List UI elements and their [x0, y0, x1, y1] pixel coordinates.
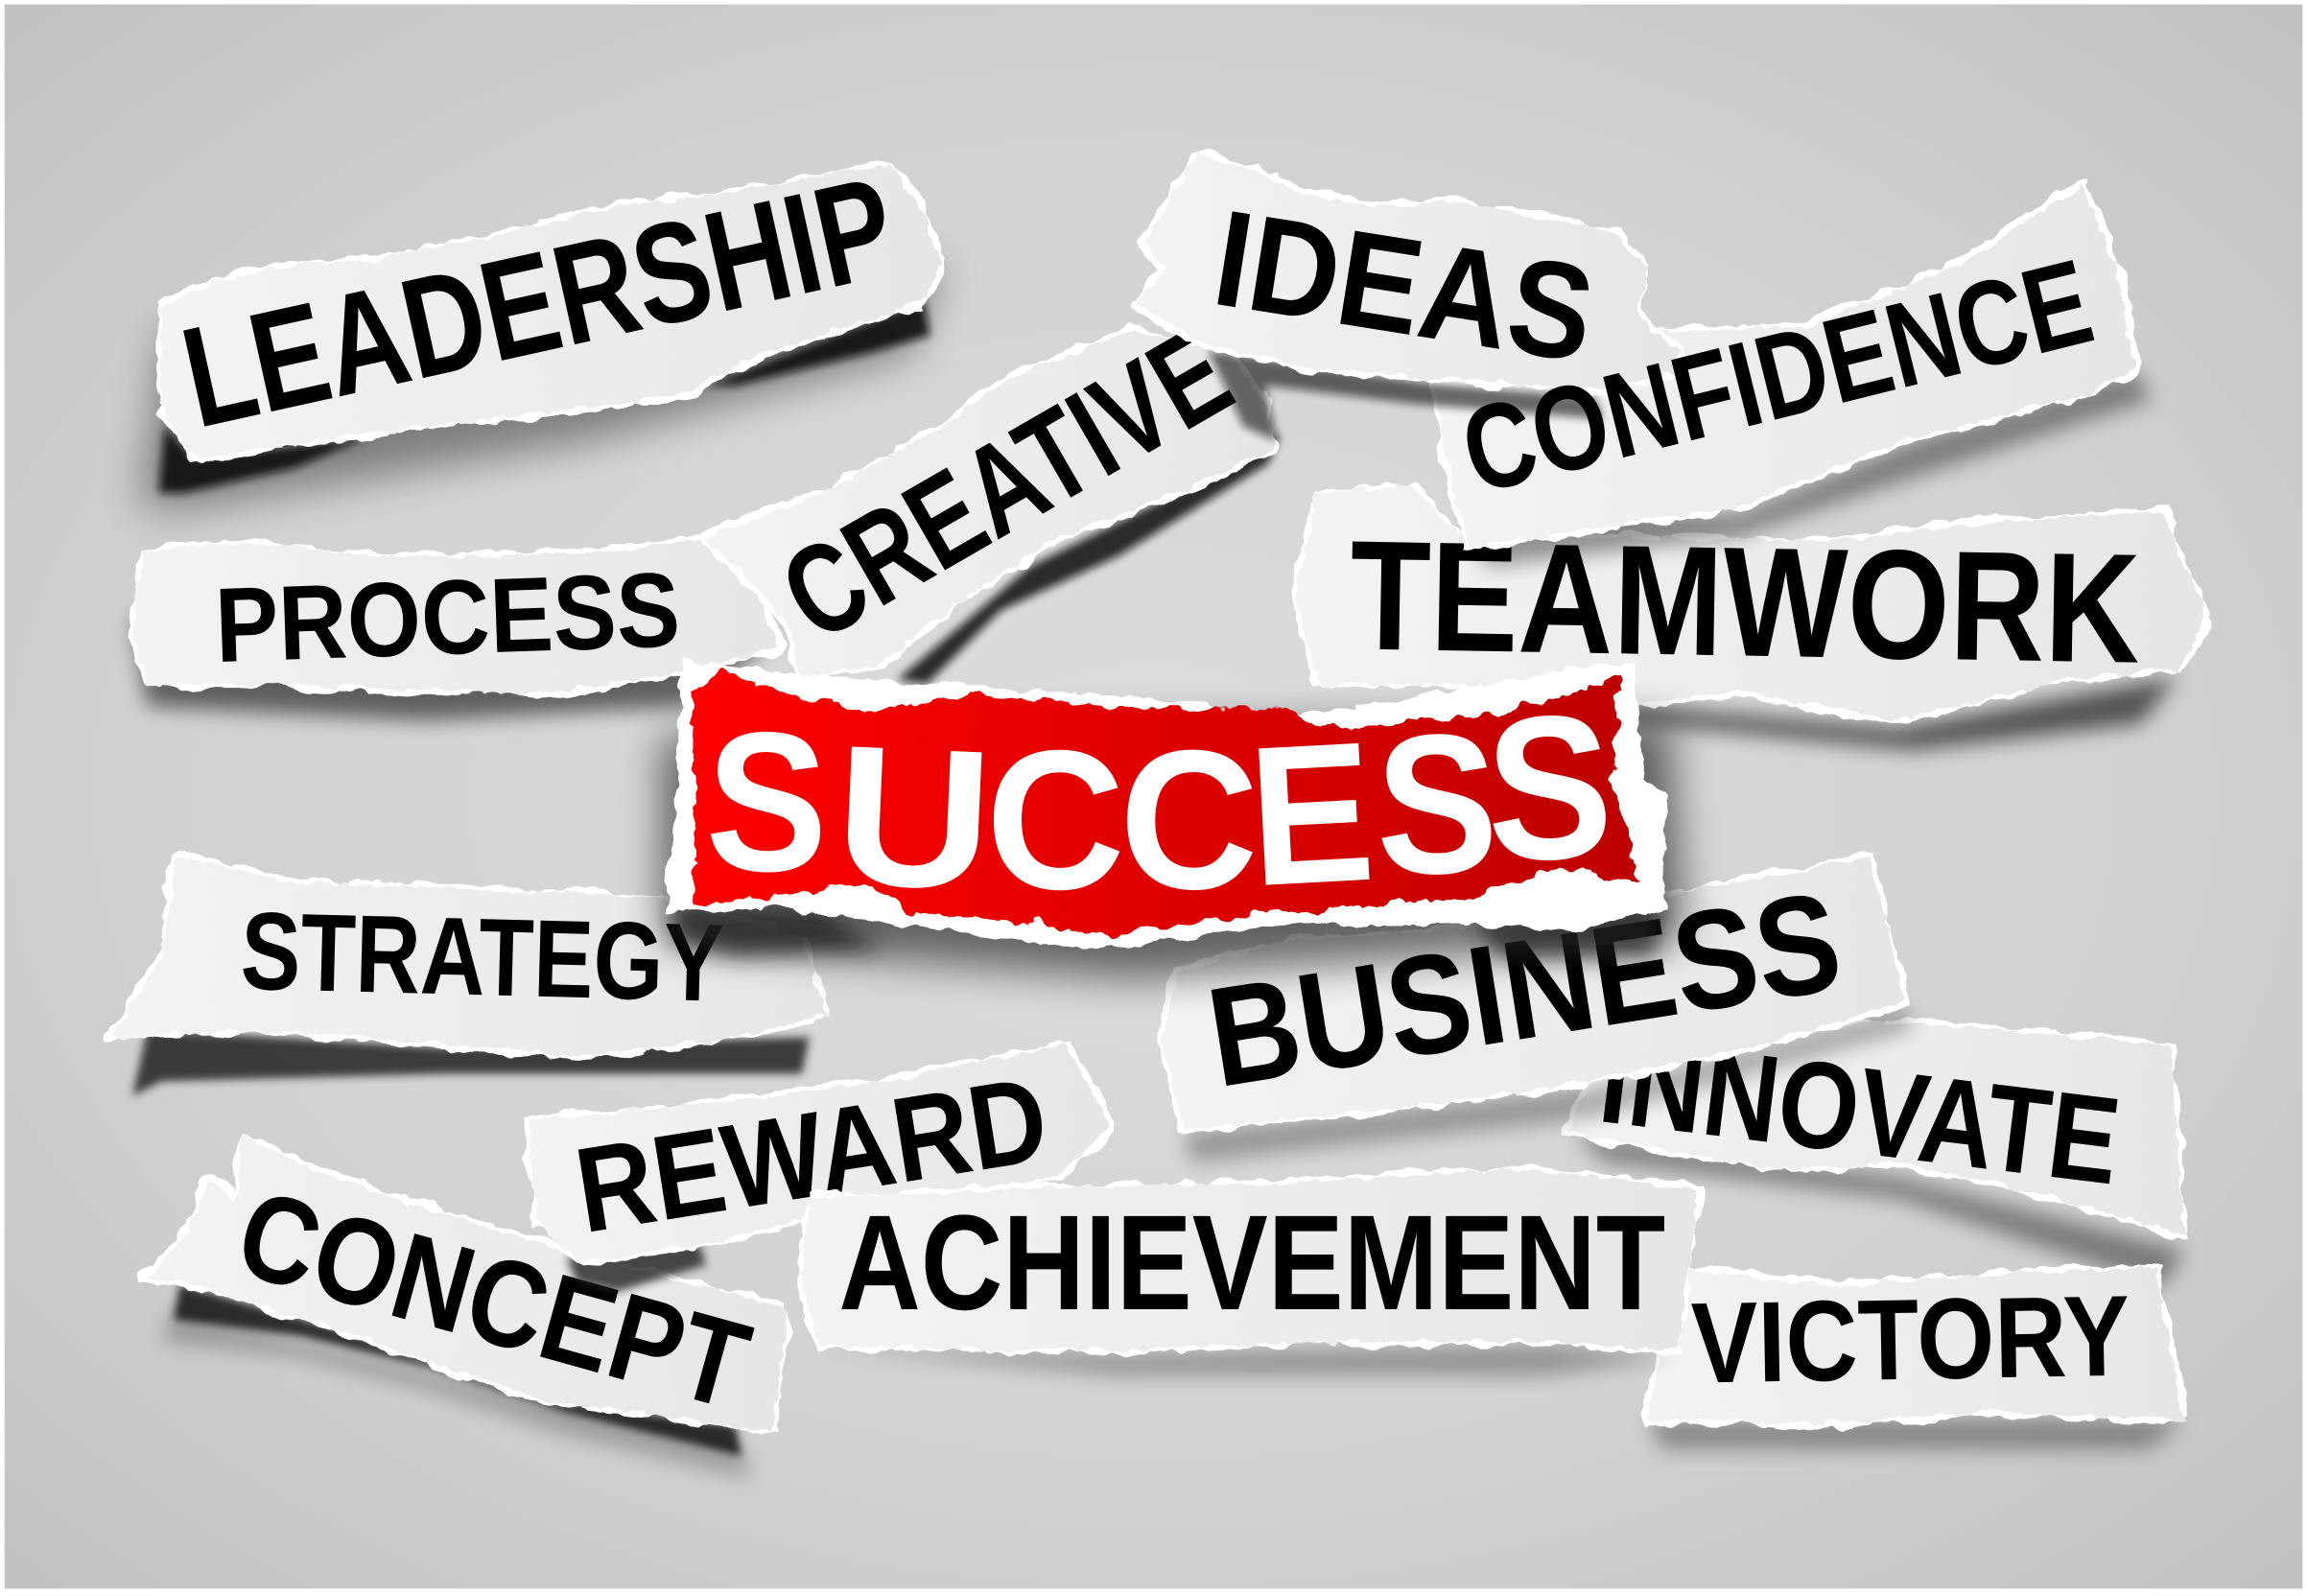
paper: VICTORY: VICTORY — [1690, 1273, 2130, 1408]
paper: CONCEPT — [144, 1136, 786, 1478]
paper: SUCCESS — [662, 665, 1684, 978]
paper: IDEAS: IDEAS — [1205, 182, 1604, 391]
word: SUCCESS: C — [986, 710, 1125, 931]
paper: VICTORY — [1645, 1268, 2185, 1449]
paper: PROCESS: PROCESS — [213, 551, 682, 685]
paper: TEAMWORK: TEAMWORK — [1349, 508, 2141, 696]
word: SUCCESS: S — [704, 691, 830, 914]
word: SUCCESS: E — [1244, 700, 1378, 928]
paper: CREATIVE — [703, 300, 1280, 684]
paper: STRATEGY — [110, 857, 827, 1096]
paper: CREATIVE: CREATIVE — [759, 300, 1254, 669]
word: SUCCESS: S — [1482, 672, 1615, 904]
word: SUCCESS: C — [1118, 708, 1260, 932]
paper: INNOVATE: INNOVATE — [1593, 1010, 2127, 1211]
paper: CONCEPT: CONCEPT — [224, 1163, 763, 1436]
paper: CONFIDENCE — [1433, 184, 2151, 566]
paper: STRATEGY: STRATEGY — [239, 890, 725, 1025]
paper: LEADERSHIP — [140, 146, 942, 507]
paper: IDEAS — [1135, 152, 1681, 441]
word: SUCCESS — [704, 672, 1615, 932]
text: CONFIDENCE: CONFIDENCE — [1449, 233, 2105, 520]
paper: ACHIEVEMENT — [802, 1169, 1699, 1375]
paper: ACHIEVEMENT: ACHIEVEMENT — [838, 1186, 1665, 1338]
paper: TEAMWORK — [1295, 485, 2207, 750]
paper: BUSINESS: BUSINESS — [1198, 862, 1850, 1117]
paper: LEADERSHIP: LEADERSHIP — [169, 146, 907, 458]
paper: REWARD: REWARD — [567, 1050, 1056, 1258]
paper: PROCESS — [132, 537, 780, 720]
word: SUCCESS: S — [1374, 692, 1499, 917]
word: SUCCESS: U — [831, 703, 997, 931]
